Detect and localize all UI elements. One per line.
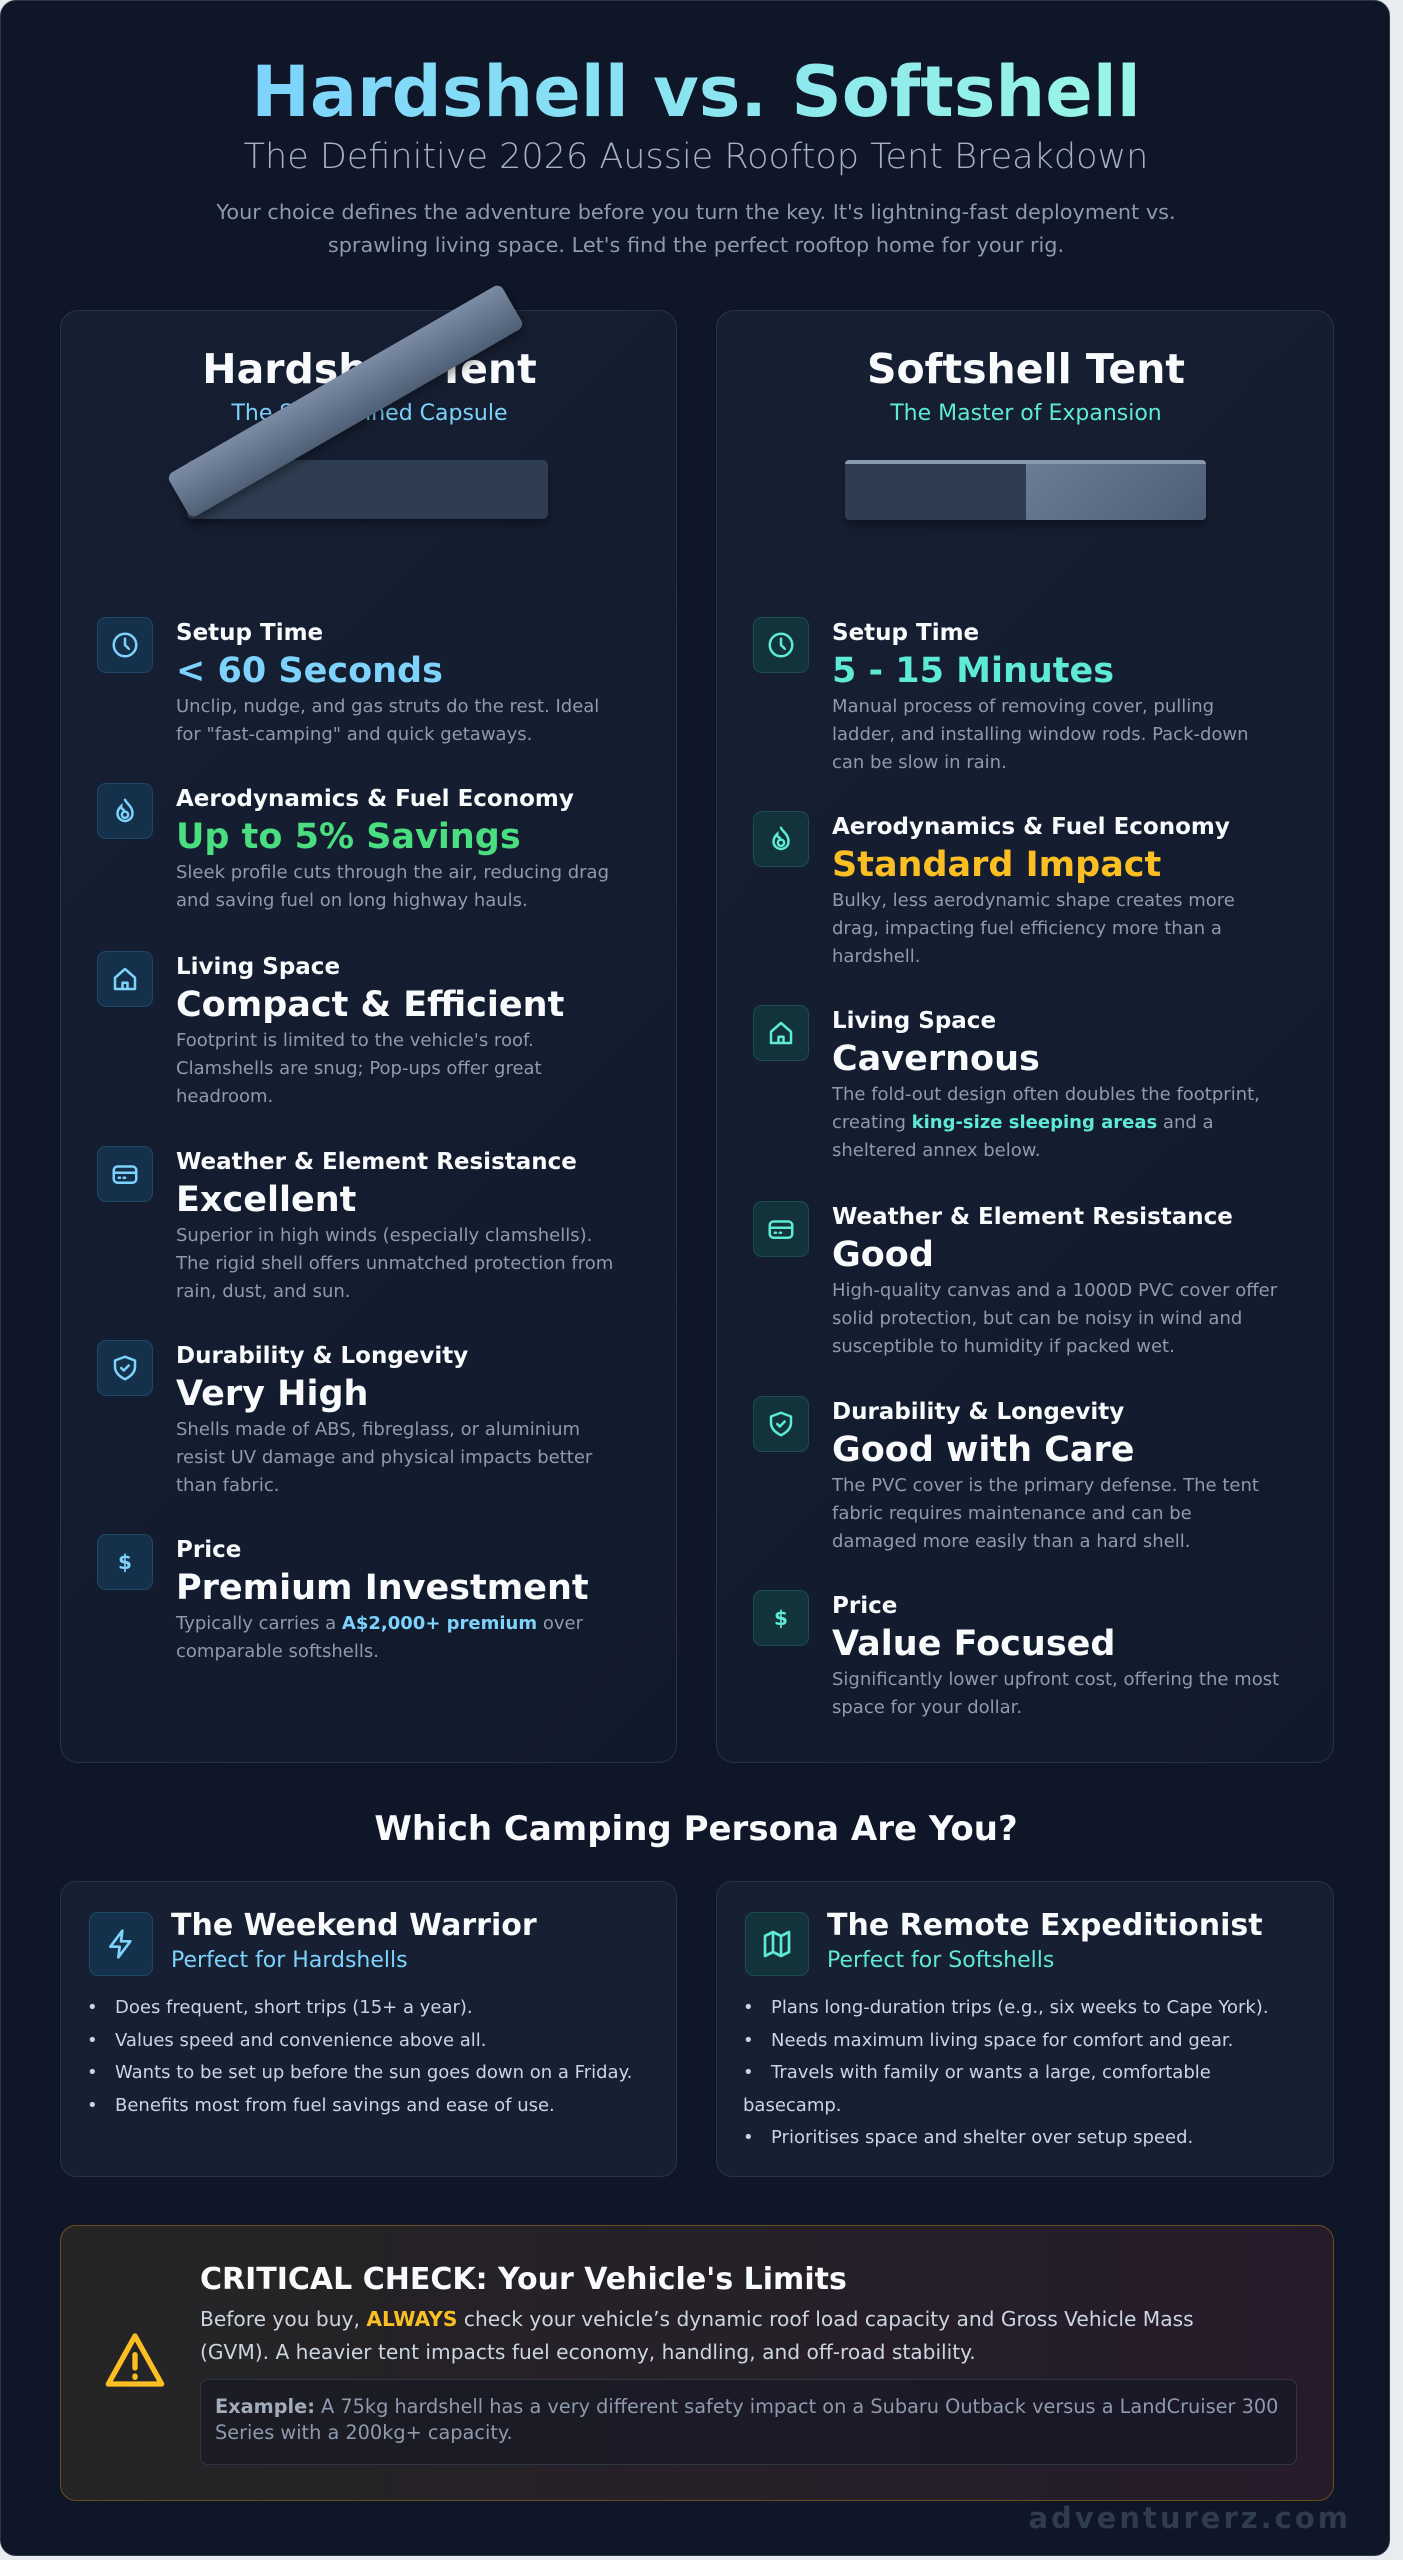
row: softshell aerodynamics: drag, impacting fuel efficiency more than a: [832, 918, 1222, 939]
row: softshell weather: High-quality canvas and a 1000D PVC cover offer: [832, 1280, 1277, 1301]
row: hardshell price: comparable softshells.: [176, 1641, 379, 1662]
intro text: Your choice defines the adventure before you turn the key. It's lightning-fast deployment vs.: [216, 200, 1176, 224]
row: hardshell living space: headroom.: [176, 1086, 273, 1107]
callout: critical check: CRITICAL CHECK: Your Vehicle's Limits: [200, 2262, 847, 2297]
row: softshell durability: Durability & Longevity: [832, 1399, 1124, 1425]
heading: softshell tent: Softshell Tent: [867, 345, 1185, 393]
row: softshell aerodynamics: hardshell.: [832, 946, 921, 967]
row: hardshell setup time: [97, 617, 599, 745]
icon: lightning: [89, 1912, 153, 1976]
row: hardshell living space: Clamshells are snug; Pop-ups offer great: [176, 1058, 542, 1079]
heading: hardshell tent: Hardshell Tent: [202, 345, 537, 393]
illustration: softshell tent: [845, 460, 1206, 520]
row: hardshell price: Typically carries a A$2,000+ premium over: [176, 1613, 583, 1634]
row: softshell durability: fabric requires maintenance and can be: [832, 1503, 1192, 1524]
bullet list: Wants to be set up before the sun goes down on a Friday.: [115, 2062, 632, 2083]
row: hardshell durability: than fabric.: [176, 1475, 279, 1496]
row: softshell setup time: can be slow in rain.: [832, 752, 1007, 773]
icon: dollar: [97, 1534, 153, 1590]
callout: critical check: (GVM). A heavier tent impacts fuel economy, handling, and off-road stability.: [200, 2340, 976, 2364]
icon: flame: [97, 783, 153, 839]
row: hardshell weather: The rigid shell offers unmatched protection from: [176, 1253, 613, 1274]
row: hardshell price: Price: [176, 1537, 241, 1563]
callout: critical check: [60, 2225, 1334, 2501]
row: softshell living space: Living Space: [832, 1008, 996, 1034]
subtitle: The Definitive 2026 Aussie Rooftop Tent Breakdown: [244, 137, 1148, 177]
row: softshell setup time: ladder, and installing window rods. Pack-down: [832, 724, 1249, 745]
row: softshell price: Significantly lower upfront cost, offering the most: [832, 1669, 1279, 1690]
row: hardshell living space: Compact & Efficient: [176, 985, 564, 1025]
illustration: hardshell tent: [168, 286, 548, 526]
row: hardshell living space: Footprint is limited to the vehicle's roof.: [176, 1030, 534, 1051]
row: softshell weather: Good: [832, 1235, 934, 1275]
bullet list: Benefits most from fuel savings and ease of use.: [115, 2095, 555, 2116]
bullet list: Does frequent, short trips (15+ a year).: [115, 1997, 473, 2018]
icon: card: [97, 1146, 153, 1202]
heading: persona: Which Camping Persona Are You?: [374, 1809, 1018, 1849]
row: hardshell aerodynamics: Up to 5% Savings: [176, 817, 521, 857]
panel: weekend warrior: The Weekend Warrior: [171, 1908, 537, 1943]
row: softshell durability: damaged more easily than a hard shell.: [832, 1531, 1191, 1552]
row: hardshell aerodynamics: and saving fuel on long highway hauls.: [176, 890, 528, 911]
row: hardshell durability: resist UV damage and physical impacts better: [176, 1447, 592, 1468]
row: hardshell weather: rain, dust, and sun.: [176, 1281, 350, 1302]
icon: dollar: $: [118, 1550, 132, 1574]
row: softshell living space: creating king-size sleeping areas and a: [832, 1112, 1214, 1133]
row: hardshell living space: Living Space: [176, 954, 340, 980]
icon: warning: [106, 2333, 164, 2387]
row: hardshell weather: Weather & Element Resistance: [176, 1149, 577, 1175]
row: hardshell setup time: < 60 Seconds: [176, 651, 443, 691]
panel: remote expeditionist: [716, 1881, 1334, 2177]
row: hardshell price: [97, 1534, 589, 1662]
row: softshell weather: Weather & Element Resistance: [832, 1204, 1233, 1230]
example box: Series with a 200kg+ capacity.: [215, 2421, 513, 2444]
bullet list: Values speed and convenience above all.: [115, 2030, 487, 2051]
example box: Example: A 75kg hardshell has a very different safety impact on a Subaru Outback versus a LandCruiser 300: [215, 2395, 1278, 2418]
icon: dollar: $: [774, 1606, 788, 1630]
icon: shield: [97, 1340, 153, 1396]
row: softshell durability: [753, 1396, 1259, 1552]
subheading: The Streamlined Capsule: [231, 401, 508, 426]
panel: weekend warrior: [60, 1881, 677, 2177]
subheading: The Master of Expansion: [890, 401, 1162, 426]
row: hardshell setup time: Unclip, nudge, and gas struts do the rest. Ideal: [176, 696, 599, 717]
callout: critical check: Before you buy, ALWAYS check your vehicle’s dynamic roof load capacity and Gross Vehicle Mass: [200, 2307, 1194, 2331]
row: hardshell aerodynamics: Sleek profile cuts through the air, reducing drag: [176, 862, 609, 883]
row: hardshell durability: Very High: [176, 1374, 368, 1414]
row: softshell setup time: Manual process of removing cover, pulling: [832, 696, 1214, 717]
bullet list: basecamp.: [743, 2095, 842, 2116]
panel: hardshell: [60, 310, 677, 1763]
row: softshell price: Value Focused: [832, 1624, 1115, 1664]
row: softshell aerodynamics: Standard Impact: [832, 845, 1161, 885]
row: softshell aerodynamics: Aerodynamics & Fuel Economy: [832, 814, 1230, 840]
row: hardshell weather: Excellent: [176, 1180, 356, 1220]
row: softshell living space: Cavernous: [832, 1039, 1040, 1079]
panel: remote expeditionist: The Remote Expeditionist: [827, 1908, 1263, 1943]
row: softshell price: [753, 1590, 1279, 1718]
row: hardshell setup time: for "fast-camping" and quick getaways.: [176, 724, 532, 745]
row: hardshell aerodynamics: Aerodynamics & Fuel Economy: [176, 786, 574, 812]
row: softshell weather: solid protection, but can be noisy in wind and: [832, 1308, 1242, 1329]
row: hardshell durability: Shells made of ABS, fibreglass, or aluminium: [176, 1419, 580, 1440]
row: softshell setup time: Setup Time: [832, 620, 979, 646]
bullet list: Prioritises space and shelter over setup speed.: [771, 2127, 1193, 2148]
icon: map: [745, 1912, 809, 1976]
row: hardshell durability: Durability & Longevity: [176, 1343, 468, 1369]
row: softshell durability: The PVC cover is the primary defense. The tent: [832, 1475, 1259, 1496]
title: Hardshell vs. Softshell: [251, 51, 1141, 133]
intro text: [216, 200, 1176, 257]
row: softshell aerodynamics: Bulky, less aerodynamic shape creates more: [832, 890, 1235, 911]
watermark: adventurerz.com: [1028, 2501, 1351, 2535]
row: softshell weather: susceptible to humidity if packed wet.: [832, 1336, 1175, 1357]
row: softshell setup time: [753, 617, 1249, 773]
intro text: sprawling living space. Let's find the perfect rooftop home for your rig.: [328, 233, 1064, 257]
icon: clock: [753, 617, 809, 673]
icon: shield: [753, 1396, 809, 1452]
icon: dollar: [753, 1590, 809, 1646]
row: hardshell living space: [97, 951, 564, 1107]
icon: clock: [97, 617, 153, 673]
icon: flame: [753, 811, 809, 867]
row: hardshell durability: [97, 1340, 592, 1496]
icon: card: [753, 1201, 809, 1257]
example box: [200, 2379, 1297, 2465]
row: hardshell price: Premium Investment: [176, 1568, 589, 1608]
row: hardshell weather: [97, 1146, 613, 1302]
row: hardshell weather: Superior in high winds (especially clamshells).: [176, 1225, 592, 1246]
row: hardshell aerodynamics: [97, 783, 609, 911]
panel: weekend warrior: Perfect for Hardshells: [171, 1948, 408, 1973]
row: softshell aerodynamics: [753, 811, 1235, 967]
row: softshell durability: Good with Care: [832, 1430, 1135, 1470]
row: softshell living space: [753, 1005, 1260, 1161]
row: softshell living space: sheltered annex below.: [832, 1140, 1041, 1161]
row: softshell price: Price: [832, 1593, 897, 1619]
row: hardshell setup time: Setup Time: [176, 620, 323, 646]
bullet list: Travels with family or wants a large, comfortable: [771, 2062, 1211, 2083]
panel: remote expeditionist: Perfect for Softshells: [827, 1948, 1054, 1973]
row: softshell setup time: 5 - 15 Minutes: [832, 651, 1114, 691]
bullet list: [743, 1997, 1269, 2148]
bullet list: Plans long-duration trips (e.g., six weeks to Cape York).: [771, 1997, 1269, 2018]
icon: home: [753, 1005, 809, 1061]
row: softshell price: space for your dollar.: [832, 1697, 1022, 1718]
icon: home: [97, 951, 153, 1007]
row: softshell weather: [753, 1201, 1278, 1357]
panel: softshell: [716, 310, 1334, 1763]
bullet list: Needs maximum living space for comfort and gear.: [771, 2030, 1233, 2051]
row: softshell living space: The fold-out design often doubles the footprint,: [832, 1084, 1260, 1105]
bullet list: [90, 1997, 632, 2116]
